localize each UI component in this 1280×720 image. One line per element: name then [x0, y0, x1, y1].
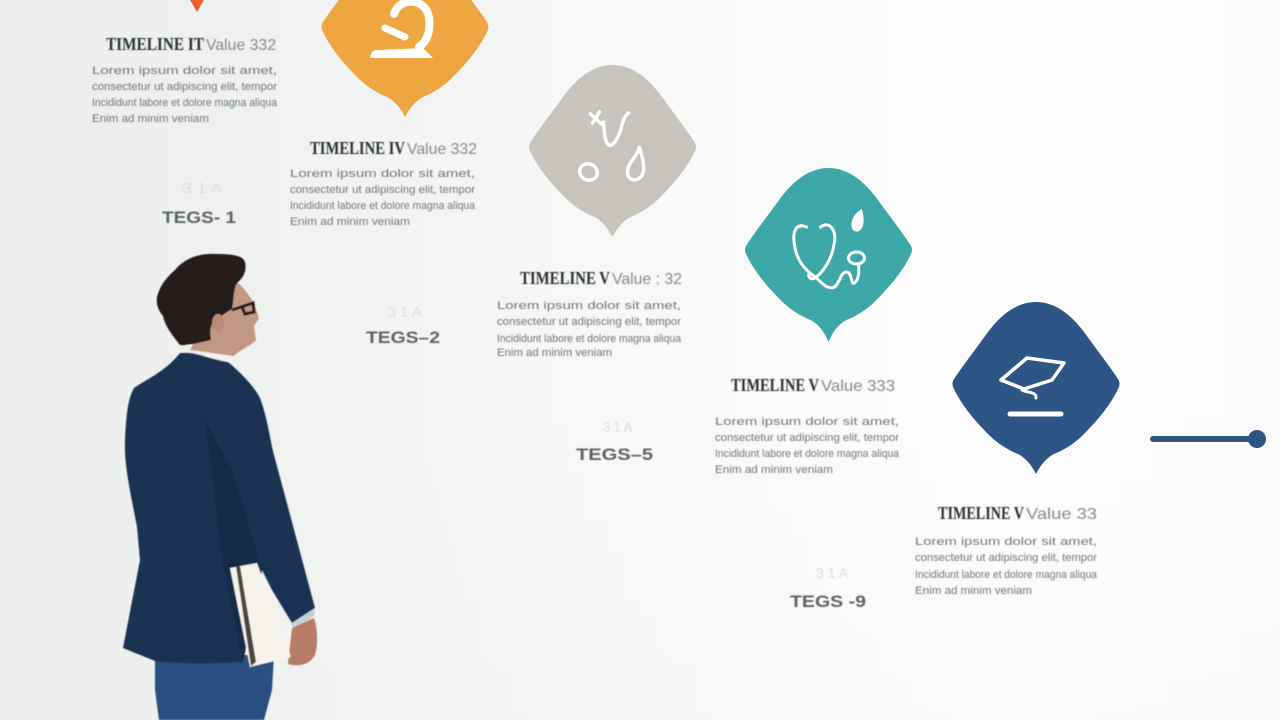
step 3 text block — [497, 268, 682, 359]
step 2 body copy: Lorem ipsum dolor sit amet, — [290, 168, 475, 180]
collar and neck — [180, 345, 232, 364]
icon: graduation cap — [1001, 358, 1064, 414]
step 5 heading: TIMELINE VValue 33 — [938, 503, 1097, 523]
end connector with dot — [1150, 430, 1266, 448]
glasses — [232, 303, 254, 314]
hand — [288, 618, 317, 665]
step 3 tag: 3 1 A — [603, 419, 632, 436]
step 1 body copy: Incididunt labore et dolore magna aliqua — [92, 97, 278, 109]
step 3 heading: TIMELINE VValue : 32 — [520, 268, 682, 288]
step 5 body copy: Lorem ipsum dolor sit amet, — [915, 536, 1097, 548]
step 2 body copy: consectetur ut adipiscing elit, tempor — [290, 184, 475, 196]
step 4 tag — [790, 565, 866, 611]
blazer shading — [205, 420, 262, 662]
step 4 tag: 3 1 A — [816, 565, 848, 582]
step 5 body copy — [915, 536, 1098, 597]
step 2 tag: 3 1 A — [388, 304, 422, 321]
hair — [157, 254, 246, 345]
step 1 tag: TEGS- 1 — [162, 208, 236, 227]
step 4 body copy: consectetur ut adipiscing elit, tempor — [715, 432, 899, 444]
step 2 body copy: Incididunt labore et dolore magna aliqua — [290, 200, 476, 212]
step 4 heading: TIMELINE VValue 333 — [731, 375, 895, 395]
shirt cuff — [291, 608, 315, 630]
step 2 tag: TEGS–2 — [366, 328, 440, 347]
step 3 body copy: Incididunt labore et dolore magna aliqua — [497, 333, 682, 345]
step 3 body copy: Lorem ipsum dolor sit amet, — [497, 300, 681, 312]
step 3 tag — [576, 419, 653, 464]
step 4 body copy: Enim ad minim veniam — [715, 464, 833, 476]
step 1 tag — [162, 180, 236, 227]
icon pin: orange microscope — [322, 0, 488, 117]
step 4 body copy: Incididunt labore et dolore magna aliqua — [715, 448, 900, 460]
step 5 body copy: Enim ad minim veniam — [915, 585, 1032, 597]
icon: microscope — [370, 2, 433, 58]
step 1 body copy — [92, 65, 278, 125]
icon: drops and tube — [577, 112, 644, 183]
marker: red pin tip — [190, 0, 204, 12]
step 2 body copy: Enim ad minim veniam — [290, 216, 410, 228]
icon pin: grey drops — [529, 65, 696, 237]
step 2 body copy — [290, 168, 476, 228]
step 3 body copy: Enim ad minim veniam — [497, 347, 612, 359]
step 1 text block — [92, 34, 278, 125]
step 1 tag: 3 1 A — [182, 180, 222, 197]
step 1 heading: TIMELINE ITValue 332 — [106, 34, 276, 54]
step 3 body copy — [497, 300, 682, 359]
ear — [212, 314, 224, 332]
step 4 text block — [715, 375, 900, 476]
step 5 text block — [915, 503, 1098, 597]
step 4 tag: TEGS -9 — [790, 592, 866, 611]
jeans — [155, 655, 274, 720]
step 2 tag — [366, 304, 440, 347]
person illustration: man in navy blazer holding a book — [123, 254, 317, 720]
face — [190, 278, 259, 356]
icon pin: navy graduation cap — [952, 302, 1120, 474]
book spine — [236, 566, 256, 666]
step 1 body copy: Enim ad minim veniam — [92, 113, 209, 125]
icon: stethoscope — [794, 209, 864, 288]
step 4 body copy: Lorem ipsum dolor sit amet, — [715, 416, 899, 428]
step 5 body copy: Incididunt labore et dolore magna aliqua — [915, 569, 1098, 581]
step 4 body copy — [715, 416, 900, 476]
step 2 text block — [290, 138, 477, 228]
blazer — [123, 353, 315, 663]
step 1 body copy: consectetur ut adipiscing elit, tempor — [92, 81, 277, 93]
step 3 tag: TEGS–5 — [576, 445, 653, 464]
icon pin: teal stethoscope — [745, 168, 912, 342]
book — [230, 563, 291, 667]
step 3 body copy: consectetur ut adipiscing elit, tempor — [497, 316, 681, 328]
step 1 body copy: Lorem ipsum dolor sit amet, — [92, 65, 277, 77]
step 5 body copy: consectetur ut adipiscing elit, tempor — [915, 552, 1097, 564]
step 2 heading: TIMELINE IVValue 332 — [310, 138, 477, 158]
